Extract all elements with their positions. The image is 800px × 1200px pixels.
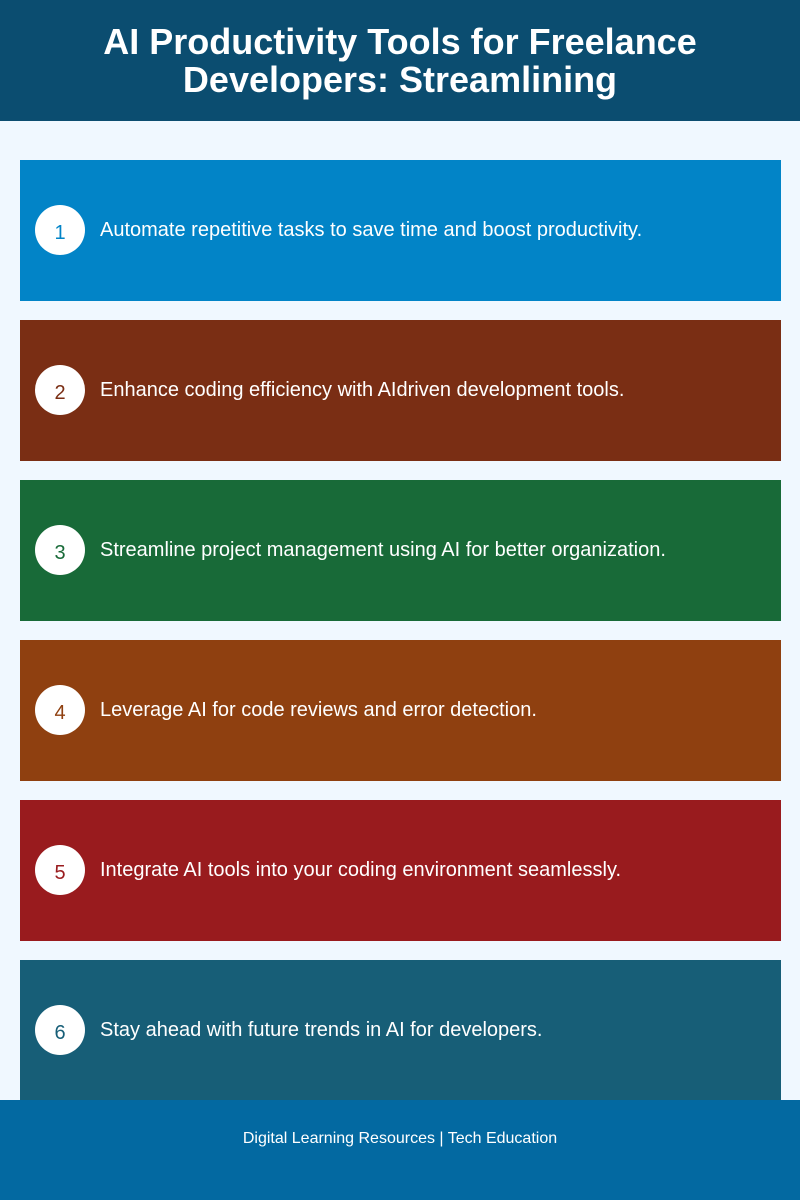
number badge 2: 2 (54, 382, 66, 404)
number badge 6 (35, 1005, 85, 1055)
panel: 1 (20, 160, 781, 301)
text 6: Stay ahead with future trends in AI for developers. (100, 1019, 542, 1041)
number badge 6: 6 (54, 1022, 66, 1044)
title: Developers: Streamlining (183, 59, 617, 100)
number badge 4 (35, 685, 85, 735)
text 3: Streamline project management using AI for better organization. (100, 539, 666, 561)
number badge 4: 4 (54, 702, 66, 724)
number badge 5: 5 (54, 862, 66, 884)
title (103, 21, 697, 100)
number badge 2 (35, 365, 85, 415)
text 2: Enhance coding efficiency with AIdriven development tools. (100, 379, 624, 401)
text 1: Automate repetitive tasks to save time and boost productivity. (100, 219, 642, 241)
panel: 2 (20, 320, 781, 461)
panel: 4 (20, 640, 781, 781)
header (0, 0, 800, 121)
number badge 5 (35, 845, 85, 895)
number badge 3: 3 (54, 542, 66, 564)
panel: 3 (20, 480, 781, 621)
title: AI Productivity Tools for Freelance (103, 21, 697, 62)
text 5: Integrate AI tools into your coding environment seamlessly. (100, 859, 621, 881)
footer (0, 1100, 800, 1200)
number badge 1: 1 (54, 222, 66, 244)
number badge 1 (35, 205, 85, 255)
text 4: Leverage AI for code reviews and error detection. (100, 699, 537, 721)
panel: 5 (20, 800, 781, 941)
footer text: Digital Learning Resources | Tech Education (243, 1130, 557, 1147)
number badge 3 (35, 525, 85, 575)
panel: 6 (20, 960, 781, 1101)
